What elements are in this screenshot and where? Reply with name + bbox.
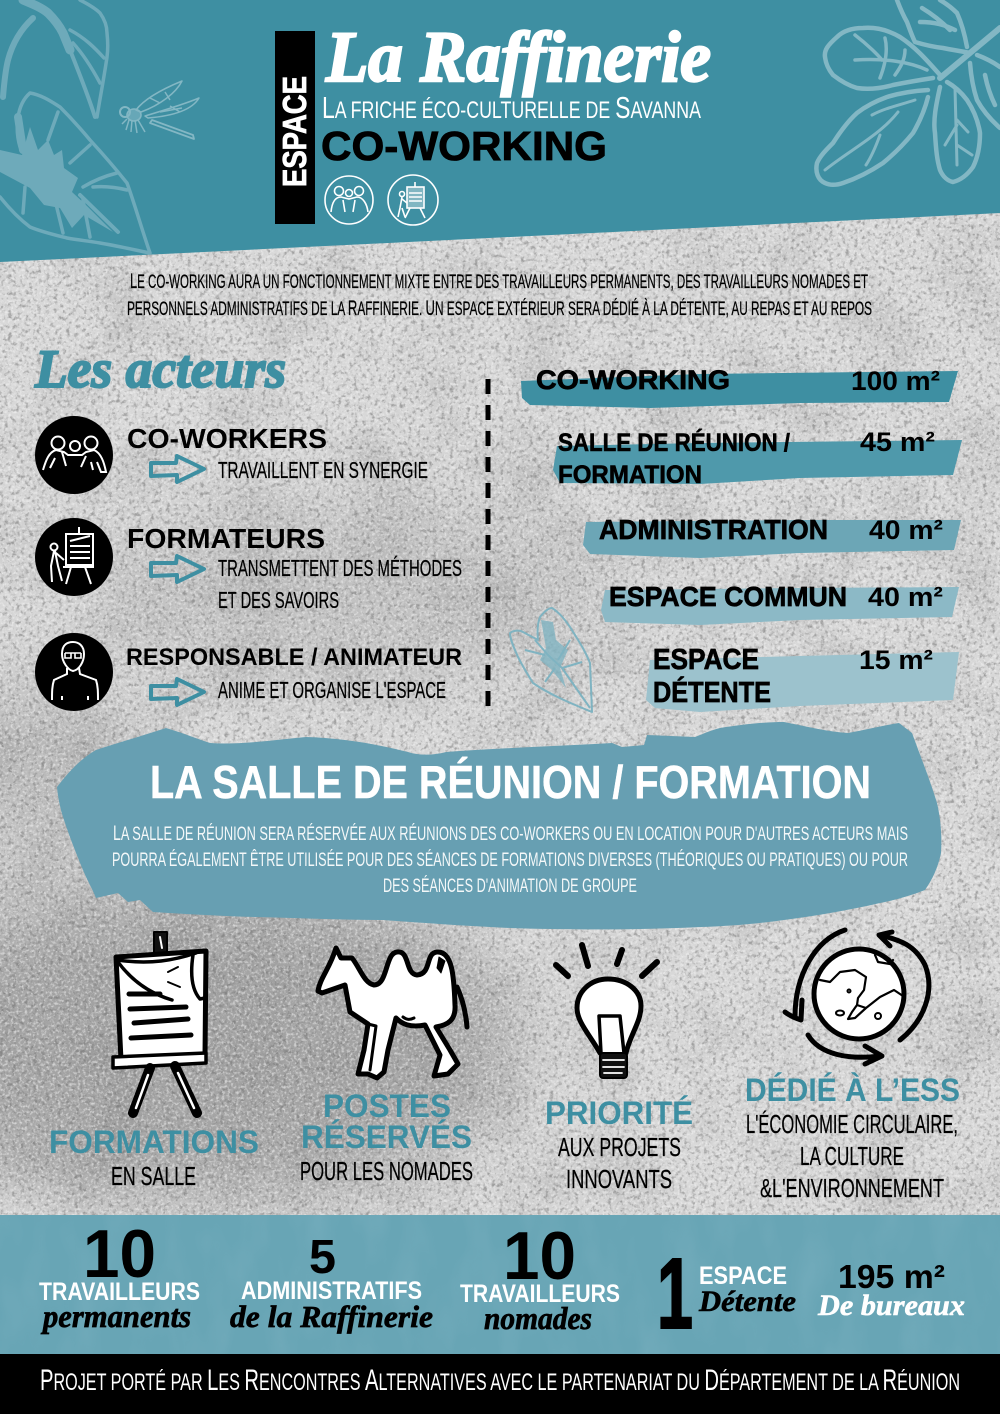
subtitle: LA FRICHE ÉCO-CULTURELLE DE SAVANNA [322,90,701,125]
left leaf blot [0,127,113,232]
actor: responsable [35,633,462,711]
actor: formateurs: ET DES SAVOIRS [218,587,339,613]
bar: espace commun: ESPACE COMMUN [609,581,847,612]
brush background [57,722,941,929]
arrow [151,456,204,482]
stat: travailleurs nomades [460,1218,620,1336]
header band [0,0,1000,262]
feature: postes réservés [300,948,473,1186]
bar: salle de réunion: 45 m² [860,427,935,457]
title block [275,17,711,225]
intro text [127,270,872,320]
stat: espace détente: ESPACE [699,1262,787,1290]
stat: travailleurs nomades: 10 [503,1218,576,1294]
panel: surfaces [510,365,962,712]
panel: la salle de réunion [57,722,941,929]
description: TRANSMETTENT DES MÉTHODES [218,555,462,581]
icon: camel [318,948,467,1078]
stat: administratifs [230,1231,433,1334]
right leaf decoration [816,0,1000,185]
stat: bureaux: De bureaux [817,1289,965,1322]
stat: administratifs: ADMINISTRATIFS [241,1277,422,1305]
panel: les acteurs [34,339,462,711]
icon: co-workers small [325,176,373,224]
bar: salle de réunion [553,427,962,489]
panel: key figures [0,1215,1000,1355]
bar: administration [583,514,961,558]
stat: administratifs: de la Raffinerie [230,1299,433,1334]
icon: light bulb [556,945,657,1078]
stat: espace détente [657,1238,796,1350]
feature: priorité: PRIORITÉ [545,1095,693,1131]
actor: co-workers [35,416,428,494]
left leaf decoration [0,0,150,253]
vertical label: ESPACE: ESPACE [276,76,313,187]
actor: formateurs [35,518,462,613]
bar: espace commun: 40 m² [868,582,943,612]
icon: easel [113,932,206,1113]
icon: globe with cycle arrows [785,930,929,1064]
bar: co-working: 100 m² [851,366,940,396]
bar: espace détente [646,644,959,712]
stat: bureaux: 195 m² [838,1258,945,1295]
icon: responsable [35,633,113,711]
paragraph [112,822,908,897]
arrow [151,679,204,705]
feature: dédié à l'ESS: LA CULTURE [800,1141,904,1171]
bar: espace détente: ESPACE [653,644,759,676]
stat: travailleurs nomades: TRAVAILLEURS [460,1280,620,1308]
arrow [151,556,204,582]
bar: co-working [521,365,958,408]
icon: formateur [35,518,113,596]
icon: small leaf [510,608,592,712]
stat: espace détente: 1 [657,1238,693,1350]
feature: priorité: INNOVANTS [566,1164,672,1194]
stat: bureaux [817,1258,965,1322]
feature: postes réservés: RÉSERVÉS [301,1119,472,1155]
bar: co-working: CO-WORKING [536,365,730,395]
label: FORMATEURS [127,523,325,554]
feature: formations [49,932,259,1191]
vertical label: ESPACE [275,31,315,224]
feature: postes réservés: POSTES [323,1088,451,1124]
icon: trainer small [388,175,438,225]
title: La Raffinerie: La Raffinerie [325,17,711,97]
stat: administratifs: 5 [309,1231,336,1284]
feature: formations: FORMATIONS [49,1124,259,1160]
feature: dédié à l'ESS: DÉDIÉ À L’ESS [745,1072,960,1108]
heading: les acteurs: Les acteurs [34,339,286,399]
icon: co-workers [35,416,113,494]
stat: espace détente: Détente [698,1285,796,1318]
stat: travailleurs nomades: nomades [484,1300,592,1336]
footer: PROJET PORTÉ PAR LES RENCONTRES ALTERNATIVES AVEC LE PARTENARIAT DU DÉPARTEMENT DE LA RÉUNION [40,1364,960,1397]
label: RESPONSABLE / ANIMATEUR [126,644,462,671]
heading: LA SALLE DE RÉUNION / FORMATION [150,756,871,808]
description: TRAVAILLENT EN SYNERGIE [218,457,428,483]
footer [0,1354,1000,1414]
heading: co-working: CO-WORKING [321,123,607,169]
description: ANIME ET ORGANISE L'ESPACE [218,677,446,703]
bar: espace détente: DÉTENTE [653,675,771,709]
feature: formations: EN SALLE [111,1161,196,1191]
bar: salle de réunion: FORMATION [558,461,702,489]
feature: postes réservés: POUR LES NOMADES [300,1156,473,1186]
stat: travailleurs permanents: TRAVAILLEURS [39,1278,200,1306]
stat: travailleurs permanents: permanents [40,1298,191,1334]
stat: travailleurs permanents: 10 [83,1216,156,1292]
bar: administration: ADMINISTRATION [599,514,828,545]
bar: salle de réunion: SALLE DE RÉUNION / [558,428,790,457]
bar: espace commun [601,581,959,625]
bar: administration: 40 m² [869,515,943,545]
feature: priorité [545,945,693,1194]
paragraph: DES SÉANCES D'ANIMATION DE GROUPE [383,876,637,897]
bar: espace détente: 15 m² [859,645,933,675]
icon: dragonfly [120,81,199,139]
stat: travailleurs permanents [39,1216,200,1334]
feature: priorité: AUX PROJETS [558,1132,681,1162]
feature: dédié à l'ESS [745,930,960,1203]
label: CO-WORKERS [127,423,327,454]
